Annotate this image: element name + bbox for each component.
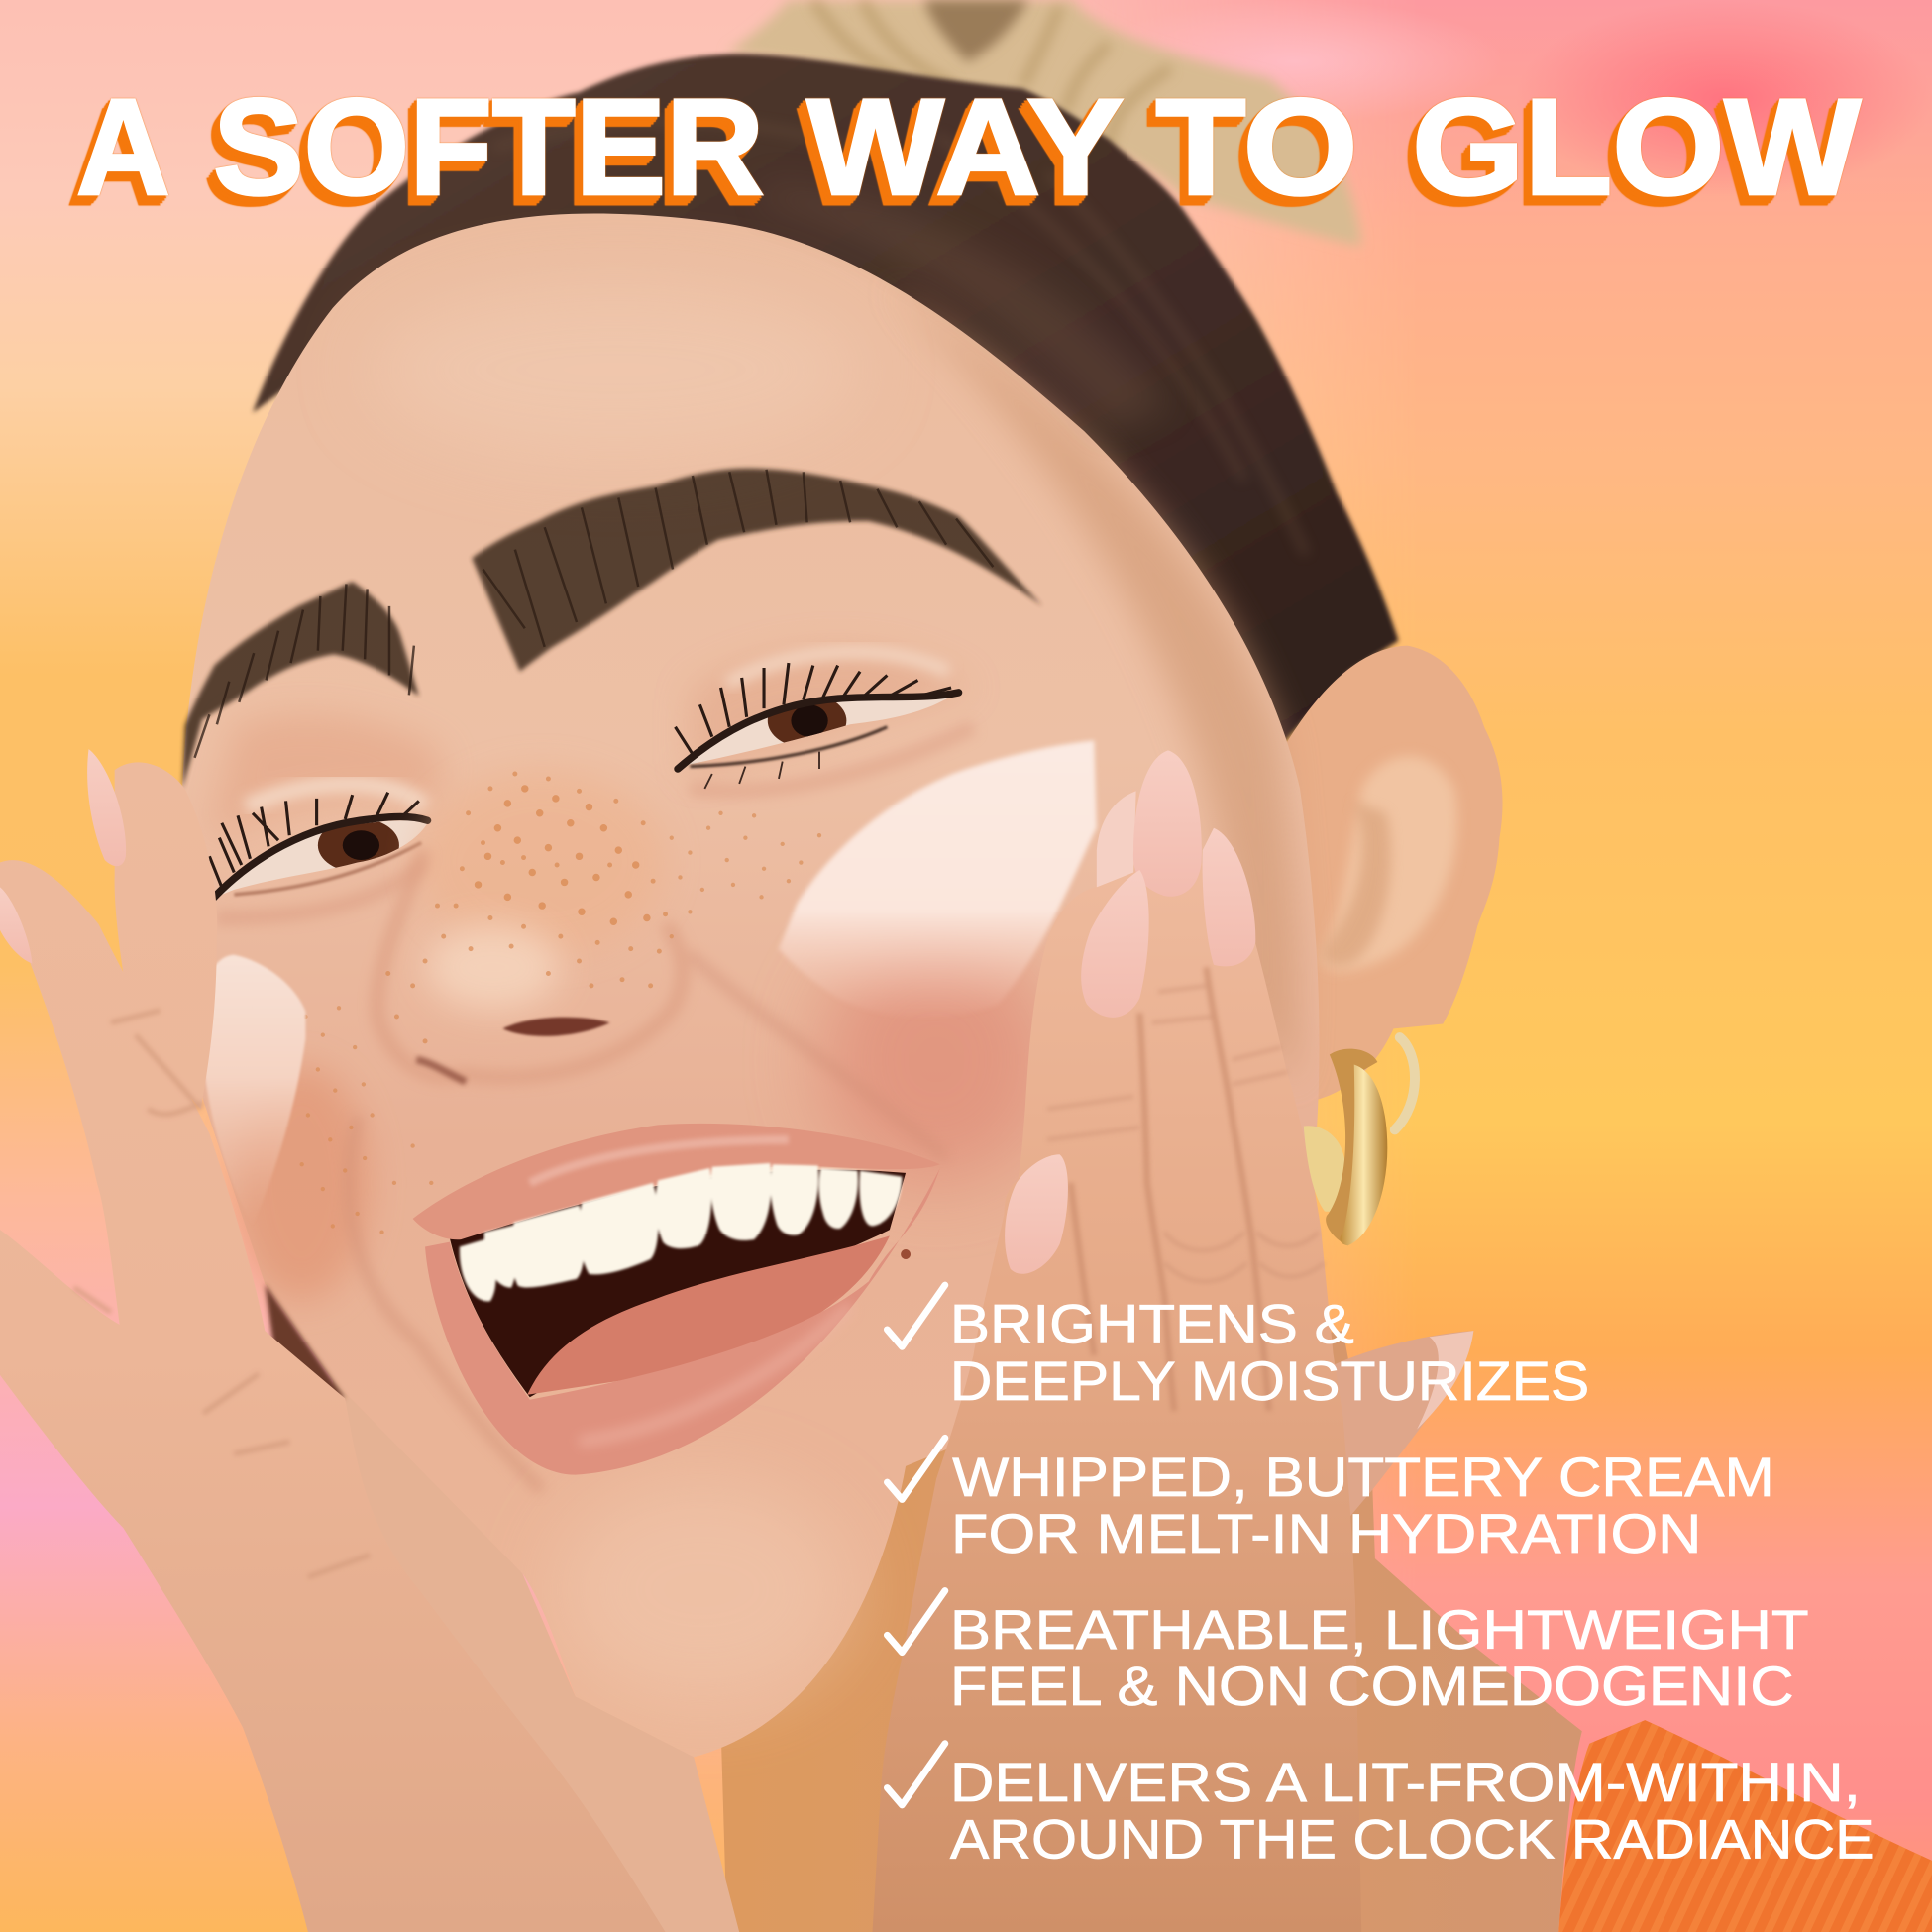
right eyebrow	[472, 469, 1042, 672]
knuckle creases	[1047, 986, 1325, 1281]
nail: index	[87, 749, 126, 866]
nail: far left finger	[1005, 1154, 1068, 1274]
chin area	[555, 1478, 850, 1700]
benefit 3 text: BREATHABLE, LIGHTWEIGHT	[950, 1598, 1809, 1661]
icon: check	[887, 1591, 945, 1653]
benefit 2 text: WHIPPED, BUTTERY CREAM	[952, 1446, 1774, 1508]
title: TO	[1156, 71, 1357, 224]
hand creases	[74, 1011, 370, 1577]
beauty mark	[901, 1249, 911, 1259]
benefit 3	[887, 1591, 1809, 1717]
icon: check	[887, 1285, 945, 1346]
gap shadow	[265, 1284, 345, 1399]
benefit 1 text: BRIGHTENS &	[950, 1293, 1354, 1355]
benefit 2 text: FOR MELT-IN HYDRATION	[951, 1502, 1701, 1564]
face	[182, 185, 1320, 1757]
benefit 4 text: DELIVERS A LIT-FROM-WITHIN,	[950, 1751, 1861, 1813]
under eye shading	[216, 863, 425, 917]
teeth	[460, 1163, 902, 1301]
palm and fingers	[0, 860, 666, 1932]
nail: third finger	[1133, 750, 1202, 897]
benefit 4	[887, 1744, 1875, 1870]
benefit 1 text: DEEPLY MOISTURIZES	[950, 1349, 1589, 1412]
cream on left cheek	[200, 955, 305, 1226]
hair	[253, 54, 1399, 745]
freckles	[302, 774, 819, 1233]
benefit 2 text	[951, 1446, 1774, 1564]
finger: index	[115, 762, 217, 1109]
nail: thumb	[1417, 1331, 1473, 1430]
finger separations	[1071, 967, 1269, 1411]
left eyebrow	[182, 582, 419, 789]
large gold hoop: back	[1304, 1126, 1345, 1212]
benefit 1	[887, 1285, 1589, 1412]
benefit 1 text	[950, 1293, 1589, 1412]
forehead highlight	[370, 283, 863, 456]
tongue	[527, 1235, 890, 1395]
cheek blush right	[819, 936, 1053, 1183]
large gold hoop: inner band	[1326, 1049, 1377, 1245]
nail: back	[1097, 791, 1136, 887]
left hand	[0, 749, 739, 1932]
benefit 3 text	[950, 1598, 1809, 1717]
nail: second finger	[1081, 870, 1149, 1018]
benefit 3 text: FEEL & NON COMEDOGENIC	[950, 1655, 1794, 1717]
left eye socket	[209, 714, 442, 838]
title: GLOW	[1412, 71, 1862, 224]
title: WAY	[807, 71, 1124, 224]
ear	[1281, 646, 1503, 1103]
title: SOFTER	[213, 71, 764, 224]
temple shading	[887, 283, 1299, 1084]
earrings	[1304, 1037, 1415, 1245]
icon: check	[887, 1744, 945, 1805]
right eye socket	[690, 648, 973, 776]
mouth	[413, 1124, 940, 1475]
nail: middle	[0, 887, 32, 964]
palm and fingers	[872, 789, 1361, 1932]
hair bun	[727, 0, 1361, 247]
nasolabial fold	[689, 954, 946, 1158]
title: A	[76, 71, 170, 224]
mouth interior	[450, 1170, 906, 1397]
neck	[721, 1331, 1582, 1932]
sweater	[1558, 1720, 1932, 1932]
benefit 2	[887, 1438, 1774, 1564]
nose with freckles	[302, 770, 819, 1233]
thumb	[1334, 1331, 1473, 1528]
large gold hoop: front	[1340, 1064, 1387, 1245]
hairline fade	[764, 185, 1170, 431]
upper lip	[413, 1124, 940, 1239]
right eye	[676, 652, 959, 789]
benefits list	[887, 1285, 1875, 1870]
back layer behind palm	[333, 1380, 739, 1932]
benefit 4 text	[950, 1751, 1875, 1870]
left eye	[197, 784, 428, 900]
benefit 4 text: AROUND THE CLOCK RADIANCE	[950, 1807, 1875, 1870]
cream on right cheek	[779, 740, 1097, 1018]
lower lip	[425, 1168, 940, 1475]
right hand	[872, 750, 1473, 1932]
smile fold	[349, 1117, 542, 1491]
icon: check	[887, 1438, 945, 1499]
title	[76, 71, 1862, 224]
small pave hoop	[1395, 1037, 1415, 1129]
cheek blush left	[234, 1066, 370, 1300]
nail: fourth finger	[1203, 828, 1255, 966]
